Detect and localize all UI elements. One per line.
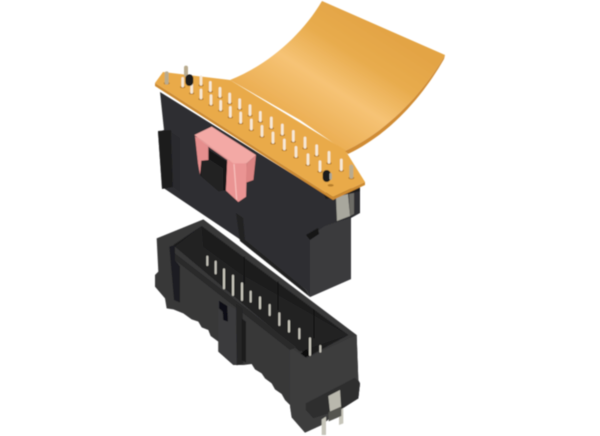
- interior cavity: [173, 226, 348, 357]
- latch opening with black block: [200, 149, 227, 191]
- terminal pins: [207, 257, 320, 355]
- flex highlighted edge: [345, 55, 445, 154]
- pin row back: [183, 77, 341, 170]
- pin row front: [192, 84, 320, 171]
- housing lower front lip: [236, 213, 310, 297]
- center latch recess: [219, 301, 228, 322]
- solder pads: [164, 82, 354, 187]
- board pins: [164, 68, 354, 187]
- center latch panel: [218, 299, 237, 365]
- latch top face: [194, 127, 256, 163]
- latch right leg: [226, 161, 247, 202]
- left wall slot: [169, 245, 180, 303]
- upper connector housing: [158, 92, 360, 297]
- latch left leg: [195, 136, 208, 175]
- right front slot: [242, 318, 246, 363]
- front wall rib: [175, 253, 297, 350]
- end foot: [306, 378, 360, 418]
- pink latch: [194, 127, 256, 202]
- flexible cable: [230, 1, 445, 151]
- grey corner posts: [167, 68, 351, 177]
- housing right end face: [310, 218, 351, 297]
- near corner opening: [301, 349, 310, 357]
- metal clip: [328, 390, 341, 412]
- end face: [290, 335, 360, 433]
- latch side: [246, 155, 256, 183]
- housing outer shape: [155, 219, 360, 433]
- printed circuit board: [155, 55, 445, 200]
- housing left guide rib: [158, 130, 173, 189]
- metal clip: [336, 194, 350, 221]
- inner ribs: [244, 257, 314, 338]
- solder legs: [322, 408, 343, 435]
- housing front notch: [306, 228, 319, 240]
- black posts: [189, 78, 327, 178]
- lower connector housing: [155, 219, 360, 435]
